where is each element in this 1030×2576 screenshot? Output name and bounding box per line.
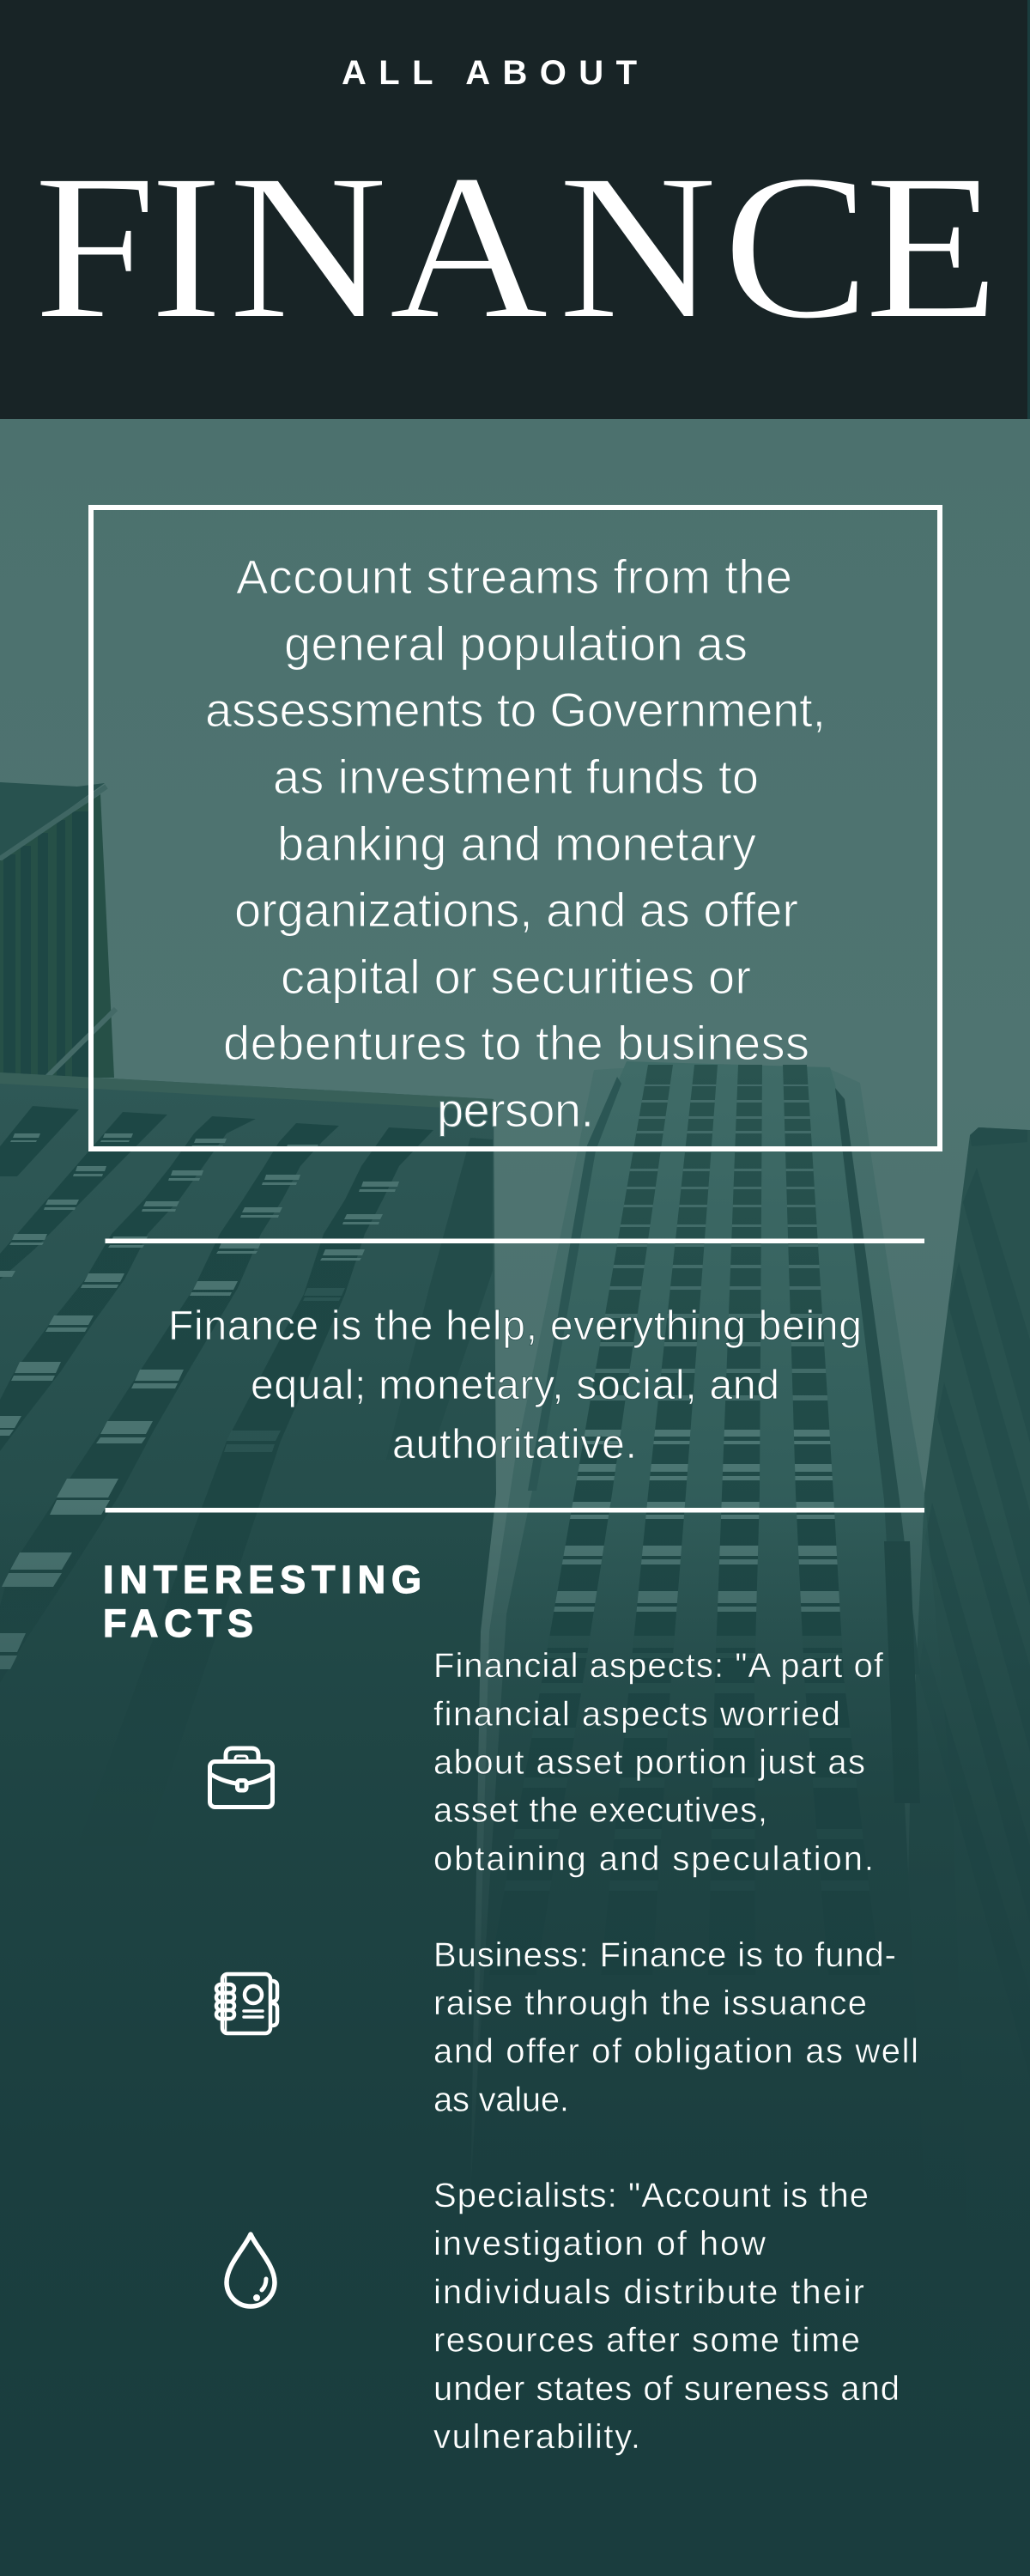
intro paragraph: debentures to the business [223, 1016, 809, 1070]
fact: financial aspects: about asset portion just as [433, 1743, 865, 1781]
definition text: authoritative. [392, 1422, 637, 1467]
fact: business [433, 1936, 918, 2119]
intro paragraph: person. [437, 1083, 594, 1137]
fact: specialists: Specialists: "Account is the [433, 2177, 869, 2215]
intro paragraph: general population as [284, 617, 748, 671]
intro paragraph: capital or securities or [281, 950, 751, 1004]
fact: specialists: individuals distribute their [433, 2274, 864, 2312]
left building [0, 1072, 496, 2576]
darkening gradient toward the bottom [0, 1503, 1030, 2576]
icon: water drop [227, 2234, 275, 2306]
fact: specialists: investigation of how [433, 2225, 766, 2263]
fact: specialists: under states of sureness and [433, 2370, 900, 2408]
intro paragraph: Account streams from the [236, 550, 792, 604]
fact: financial aspects: obtaining and speculation. [433, 1840, 874, 1878]
background: duotone skyscraper photo [0, 419, 1030, 2097]
definition text [168, 1303, 862, 1467]
fact: financial aspects: financial aspects worried [433, 1695, 840, 1733]
fact: specialists: resources after some time [433, 2322, 860, 2360]
intro paragraph: organizations, and as offer [234, 883, 798, 937]
panel: intro text box [91, 507, 940, 1149]
eyebrow: ALL ABOUT: ALL ABOUT [342, 54, 637, 92]
heading: interesting facts: INTERESTING [103, 1558, 421, 1601]
fact: financial aspects [433, 1647, 884, 1878]
fact: business: as value. [433, 2081, 569, 2119]
tower window columns [542, 1065, 844, 1683]
fact: financial aspects: Financial aspects: "A part of [433, 1647, 884, 1685]
panel: definition between rules [105, 1238, 924, 1513]
fact: business: Business: Finance is to fund- [433, 1936, 896, 1974]
header band [0, 0, 1027, 419]
fact: financial aspects: asset the executives, [433, 1791, 767, 1829]
intro paragraph: as investment funds to [273, 750, 759, 804]
intro paragraph [205, 550, 826, 1137]
intro paragraph: banking and monetary [277, 817, 756, 871]
definition text: equal; monetary, social, and [251, 1363, 779, 1408]
upper-left tower [0, 782, 116, 1078]
fact: specialists [433, 2177, 900, 2456]
icon: address book [216, 1974, 277, 2033]
title: FINANCE: FINANCE [33, 132, 999, 362]
fact: specialists: vulnerability. [433, 2418, 640, 2456]
heading: interesting facts: FACTS [103, 1601, 253, 1645]
definition text: Finance is the help, everything being [168, 1303, 862, 1349]
left building window sills [0, 1133, 399, 1652]
intro paragraph: assessments to Government, [205, 683, 826, 737]
heading: interesting facts [103, 1558, 421, 1645]
right building [893, 1127, 1030, 2576]
center tower [480, 1061, 924, 2049]
icon: briefcase [209, 1748, 273, 1807]
fact: business: raise through the issuance [433, 1984, 867, 2022]
fact: business: and offer of obligation as well [433, 2032, 918, 2070]
